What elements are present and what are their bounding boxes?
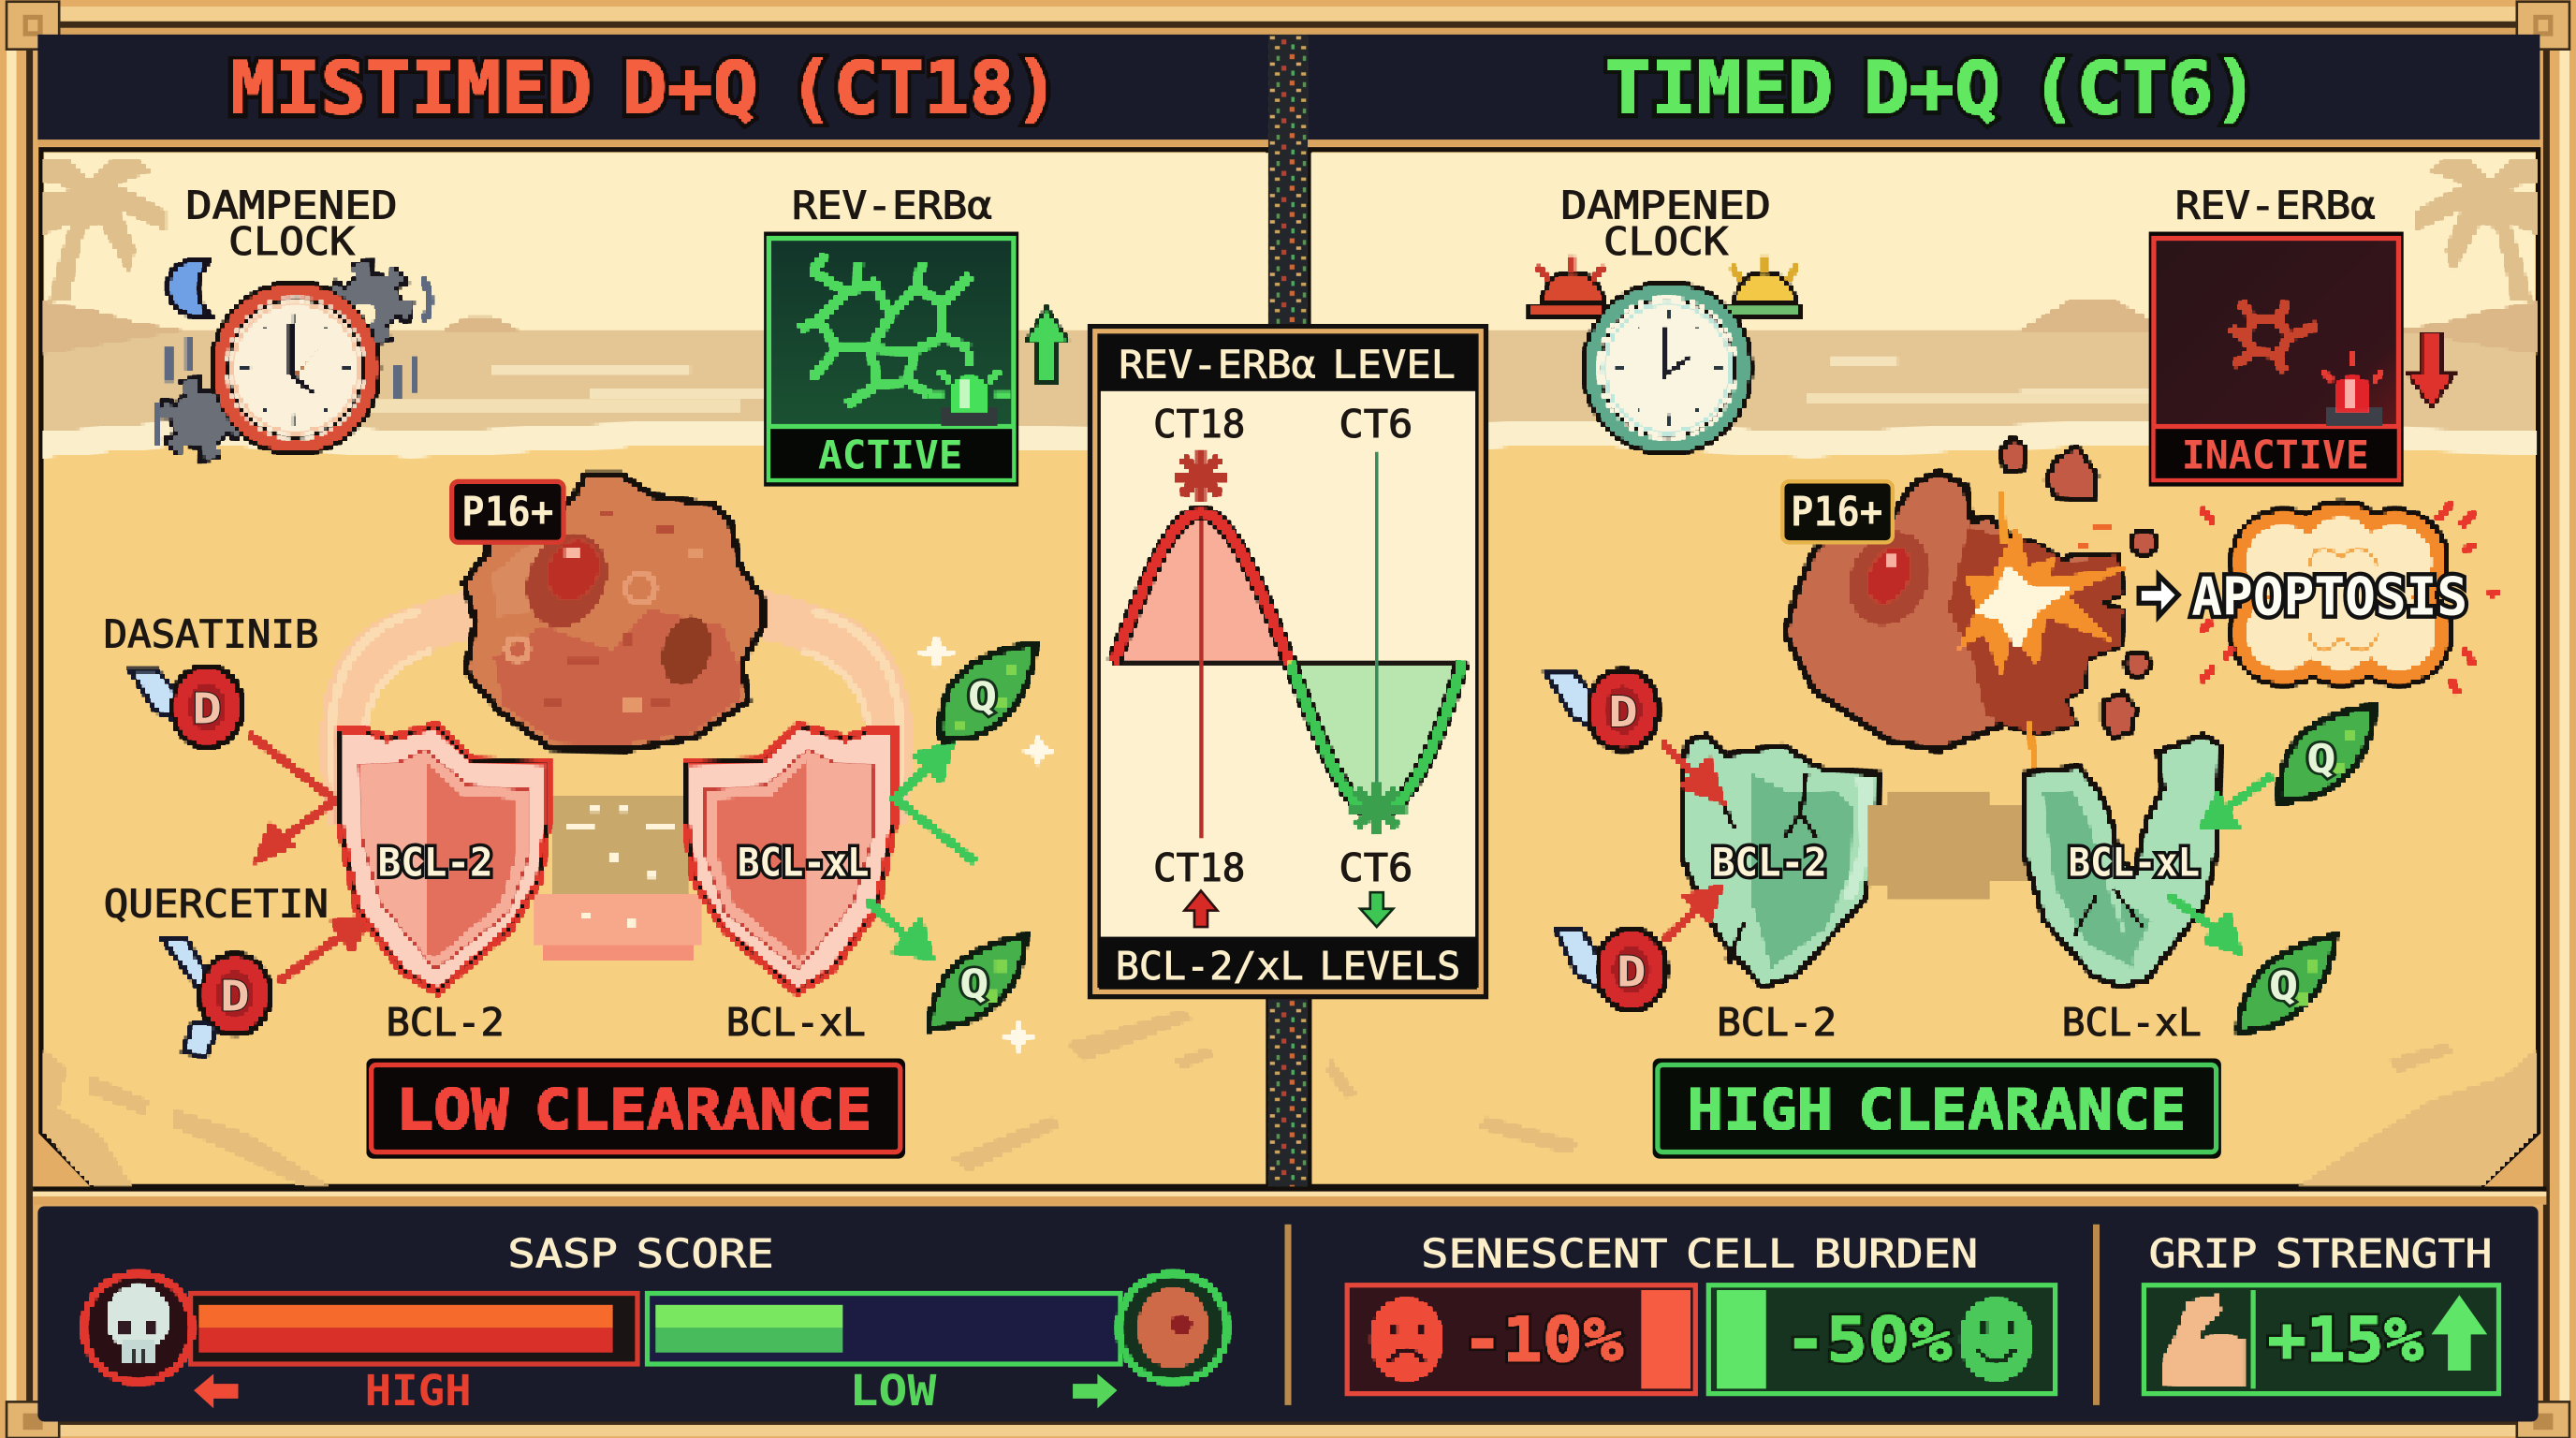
negative lobe	[1290, 662, 1462, 814]
metric: +15	[2144, 1285, 2499, 1394]
centre strip	[1268, 35, 1308, 1188]
scene background: right	[1310, 150, 2539, 1186]
chart title: REV-ERBα LEVEL	[1119, 343, 1456, 388]
label: rev-erb right: REV-ERBα	[2175, 183, 2376, 227]
panel: rev-erb level chart	[1088, 324, 1488, 999]
positive lobe	[1114, 513, 1290, 662]
badge: BCL-2	[378, 840, 493, 886]
title: mistimed: MISTIMED D+Q (CT18)	[230, 47, 1060, 131]
label: bcl-xl left: BCL-xL	[726, 1000, 866, 1045]
label: bcl-xl right: BCL-xL	[2062, 1000, 2202, 1045]
shield: bcl-2 cracked	[1682, 736, 1878, 986]
icon: healthy cell	[1119, 1273, 1227, 1382]
icon: dasatinib pill right upper	[1547, 670, 1658, 749]
icon: dasatinib pill top-left	[131, 668, 242, 746]
arrow: red quercetin	[279, 917, 368, 981]
curve	[1114, 513, 1462, 814]
label: dampened clock right	[1560, 183, 1771, 264]
icon: quercetin leaf lower right: Q	[2269, 962, 2298, 1008]
bar: high	[191, 1294, 637, 1364]
icon: quercetin leaf upper right: Q	[2306, 736, 2336, 782]
icon: apoptosis explosion: APOPTOSIS	[2191, 567, 2467, 628]
icon: quercetin leaf upper left: Q	[968, 673, 997, 719]
badge: p16 right: P16+	[1791, 489, 1882, 536]
label: dampened clock right: CLOCK	[1603, 219, 1729, 264]
arrow: high left	[194, 1374, 238, 1408]
arrow: green lower	[868, 901, 929, 957]
icon: skull	[84, 1273, 192, 1382]
badge: low clearance	[366, 1058, 905, 1159]
panel: active rev-erb	[764, 232, 1018, 487]
shield: bcl-2 left	[340, 726, 547, 991]
panel: inactive rev-erb	[2149, 232, 2404, 487]
arrow: rev-erb up	[1027, 309, 1068, 381]
icon: clock timed	[1530, 257, 1801, 452]
badge: high clearance	[1653, 1058, 2221, 1159]
panel: rev-erb level chart: CT6	[1339, 402, 1412, 447]
palm tree	[2400, 161, 2537, 353]
label: dampened clock left: DAMPENED	[185, 183, 398, 227]
glow: shields halo	[331, 600, 901, 961]
arrow: red to bcl-2 upper	[1662, 742, 1720, 799]
panel: bottom metrics	[33, 1186, 2546, 1421]
siren	[929, 352, 1009, 424]
metric: -10: -10%	[1462, 1305, 1623, 1375]
icon: dampened clock with gears and moon	[157, 259, 430, 452]
panel: rev-erb level chart: CT18	[1153, 845, 1245, 890]
header band: timed	[1308, 35, 2539, 146]
label: quercetin: QUERCETIN	[104, 882, 329, 927]
label: low: LOW	[849, 1366, 937, 1416]
active label: ACTIVE	[818, 432, 962, 477]
icon: quercetin leaf lower left	[929, 937, 1033, 1051]
badge: BCL-2	[1712, 840, 1827, 886]
sasp title: SASP SCORE	[507, 1230, 774, 1276]
icon: quercetin pill right lower	[1558, 931, 1666, 1009]
icon: quercetin leaf upper right	[2279, 707, 2374, 802]
icon: shattered cell right	[1786, 439, 2156, 781]
icon: flexed arm	[2162, 1295, 2244, 1386]
inactive label: INACTIVE	[2182, 432, 2369, 477]
moon	[168, 259, 209, 315]
badge: BCL-xL	[738, 840, 869, 886]
label: bcl-2 left: BCL-2	[386, 1000, 505, 1045]
icon: quercetin leaf lower left: Q	[959, 961, 989, 1007]
badge: high clearance: HIGH CLEARANCE	[1687, 1078, 2187, 1143]
arrow apoptosis	[2139, 575, 2178, 616]
label: high: HIGH	[365, 1366, 472, 1416]
icon: quercetin pill left: D	[220, 972, 250, 1021]
metric: -50	[1708, 1285, 2056, 1394]
bar: low	[648, 1294, 1120, 1364]
icon: dasatinib pill right upper: D	[1608, 687, 1638, 737]
arrow: green from bcl-xl lower	[2169, 896, 2237, 950]
arrow: green to bcl-xl upper	[2204, 776, 2272, 825]
badge: p16 left: P16+	[461, 489, 553, 536]
debris	[2001, 439, 2156, 736]
grip title: GRIP STRENGTH	[2149, 1230, 2492, 1276]
siren	[2323, 352, 2382, 424]
sun red	[1530, 306, 1603, 317]
panel: rev-erb level chart: BCL-2/xL LEVELS	[1116, 944, 1460, 989]
shield: bcl-xl broken	[2026, 736, 2219, 986]
label: dampened clock left: CLOCK	[228, 219, 355, 264]
arrow: red deflected	[250, 735, 335, 858]
panel: rev-erb level chart: CT18	[1153, 402, 1245, 447]
label: bcl-2 right: BCL-2	[1717, 1000, 1837, 1045]
arrow: red to bcl-2 lower	[1664, 889, 1719, 940]
marker: peak	[1177, 452, 1225, 501]
metric: -10	[1347, 1285, 1695, 1394]
metric: -50: -50%	[1784, 1305, 1952, 1375]
badge: p16 left	[452, 481, 564, 542]
badge: low clearance: LOW CLEARANCE	[396, 1078, 872, 1143]
badge: BCL-xL	[2069, 840, 2200, 886]
senescent title: SENESCENT CELL BURDEN	[1421, 1230, 1978, 1276]
shield: bcl-xl left	[687, 726, 894, 991]
header band: mistimed	[37, 35, 1270, 146]
label: dampened clock left	[185, 183, 398, 264]
scene background: left	[41, 150, 1268, 1186]
marker: trough	[1351, 784, 1406, 835]
shadow between right shields	[1869, 794, 2030, 897]
label: rev-erb left: REV-ERBα	[792, 183, 992, 227]
icon: dasatinib pill top-left: D	[192, 683, 222, 733]
gears	[339, 270, 404, 335]
title: timed: TIMED D+Q (CT6)	[1605, 47, 2259, 131]
icon: quercetin pill left	[165, 940, 270, 1055]
label: dasatinib: DASATINIB	[104, 612, 318, 657]
arrow: low right	[1073, 1374, 1117, 1408]
arrow: rev-erb down	[2410, 333, 2452, 406]
label: dampened clock right: DAMPENED	[1560, 183, 1771, 227]
sun yellow	[1727, 306, 1801, 317]
molecule	[800, 255, 970, 404]
palm tree	[44, 161, 181, 353]
icon: senescent cell left	[465, 475, 762, 749]
icon: quercetin leaf lower right	[2239, 937, 2334, 1032]
panel: rev-erb level chart: CT6	[1339, 845, 1412, 890]
molecule	[2231, 302, 2317, 372]
icon: quercetin leaf upper left	[918, 635, 1053, 766]
icon: apoptosis explosion	[2139, 500, 2499, 694]
icon: quercetin pill right lower: D	[1617, 946, 1647, 996]
metric: +15: +15%	[2267, 1305, 2423, 1375]
arrow: green deflected	[896, 746, 974, 861]
